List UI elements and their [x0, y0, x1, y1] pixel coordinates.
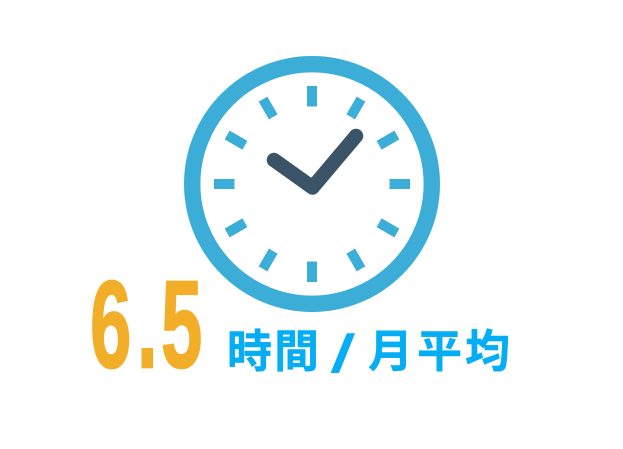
label: hours per month average: 均	[465, 326, 510, 377]
icon: clock	[192, 64, 432, 304]
label: hours per month average: 時	[227, 326, 272, 377]
label: hours per month average: 月	[368, 326, 413, 377]
big number: 6.5: 6	[90, 255, 131, 394]
label: hours per month average	[227, 325, 510, 383]
clock face ring	[192, 64, 432, 304]
label: hours per month average: /	[332, 325, 354, 383]
big number: 6.5: 5	[161, 255, 202, 394]
label: hours per month average: 平	[417, 326, 462, 377]
big number: 6.5: .	[137, 255, 158, 394]
clock hands	[274, 136, 356, 188]
big number: 6.5	[90, 255, 202, 394]
hour tick marks	[214, 86, 410, 282]
label: hours per month average: 間	[274, 326, 319, 377]
